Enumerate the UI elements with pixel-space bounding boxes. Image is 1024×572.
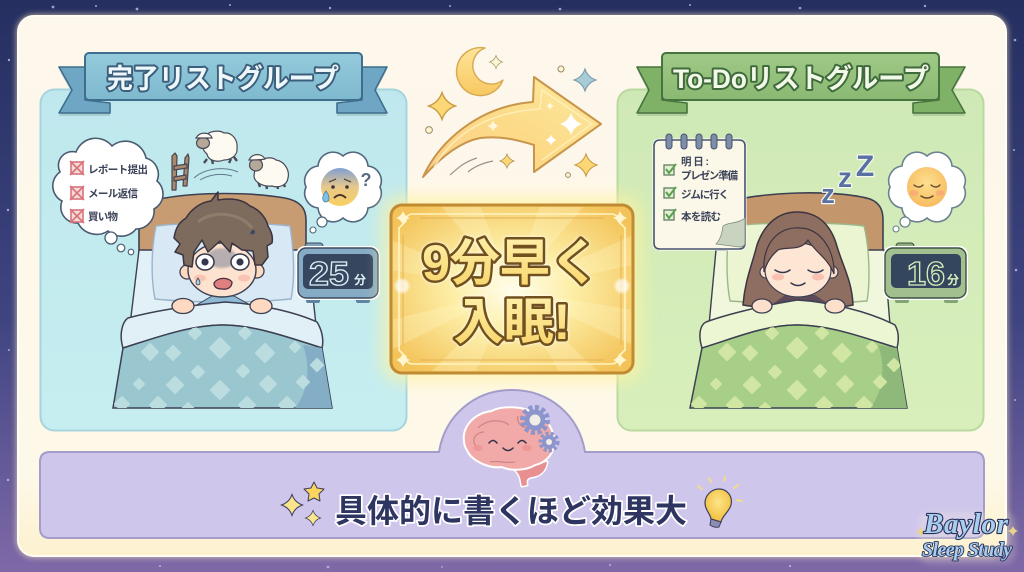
digital clock: 16 minutes: 16 (907, 255, 945, 292)
digital clock: 16 minutes: 分 (947, 273, 959, 287)
heading ribbon: to-do list group: To-Doリストグループ (673, 63, 929, 94)
task list text: レポート提出 (88, 163, 148, 176)
motion lines (194, 169, 238, 180)
notepad: to-do list (654, 134, 745, 249)
list text: ジムに行く (681, 188, 729, 201)
illustration: sleeping girl in bed (690, 193, 907, 415)
thought bubble: calm emoji (889, 152, 965, 232)
hair (174, 192, 272, 267)
headboard (716, 193, 883, 262)
fence (172, 153, 189, 190)
list text: 明日: (681, 156, 709, 168)
list text (681, 156, 738, 223)
sheep two (249, 155, 288, 189)
headboard (139, 194, 306, 262)
blanket fold (700, 300, 898, 348)
logo: Baylor Sleep Study: Baylor (923, 508, 1009, 540)
panel: to-do list group (618, 90, 984, 430)
callout: 9 minutes faster: 入眠! (454, 294, 570, 350)
arrow (423, 77, 601, 177)
mattress sheet (130, 250, 316, 325)
sleeping zzz: Z (856, 150, 874, 183)
check boxes (664, 164, 676, 220)
digital clock: 25 minutes (296, 243, 380, 303)
digital clock: 16 minutes (883, 243, 968, 303)
gears (522, 408, 548, 432)
icon: smiling brain with gears (465, 408, 558, 486)
quilt (690, 325, 907, 408)
thought bubble: anxious emoji (305, 152, 381, 233)
banner: bottom takeaway (40, 390, 984, 538)
pillow (727, 223, 869, 303)
icon: moon (457, 48, 503, 96)
heading ribbon: completed list group (59, 53, 387, 116)
crossed checkboxes (70, 161, 84, 223)
digital clock: 25 minutes: 25 (309, 255, 349, 292)
decorative stars and dots around arrow (426, 56, 597, 177)
thought bubble: crossed-out tasks (53, 138, 163, 255)
hands (752, 299, 772, 313)
panel: completed list group (40, 90, 406, 430)
brain body (465, 408, 553, 469)
sleeping zzz: z (838, 162, 852, 193)
task list text (88, 163, 148, 223)
sheep one (196, 131, 237, 164)
list text: 本を読む (681, 210, 721, 223)
list text: プレゼン準備 (681, 169, 738, 182)
digital clock: 25 minutes: 分 (354, 273, 366, 287)
illustration: worried boy in bed (113, 192, 332, 415)
sleeping zzz (821, 150, 874, 209)
takeaway text: 具体的に書くほど効果大 (335, 493, 687, 529)
icon: sparkle stars (282, 482, 324, 526)
sleeping zzz: z (821, 179, 835, 209)
task list text: メール返信 (88, 187, 138, 200)
boy head (174, 192, 272, 306)
thought bubble: anxious emoji: ? (360, 170, 372, 190)
task list text: 買い物 (88, 210, 118, 223)
logo: Baylor Sleep Study: Sleep Study (922, 539, 1012, 561)
callout: 9 minutes faster (382, 196, 642, 382)
hands (172, 298, 194, 314)
icon: light bulb (698, 477, 742, 527)
brain stem and cerebellum (513, 462, 547, 486)
heading ribbon: to-do list group (637, 53, 965, 116)
blanket fold (121, 302, 323, 348)
girl head (743, 212, 853, 309)
quilt (113, 325, 332, 408)
heading ribbon: completed list group: 完了リストグループ (107, 63, 339, 94)
mattress sheet (709, 250, 890, 325)
callout text: 9分早く (422, 235, 600, 291)
pillow (152, 223, 294, 302)
logo: Baylor Sleep Study (916, 508, 1018, 564)
